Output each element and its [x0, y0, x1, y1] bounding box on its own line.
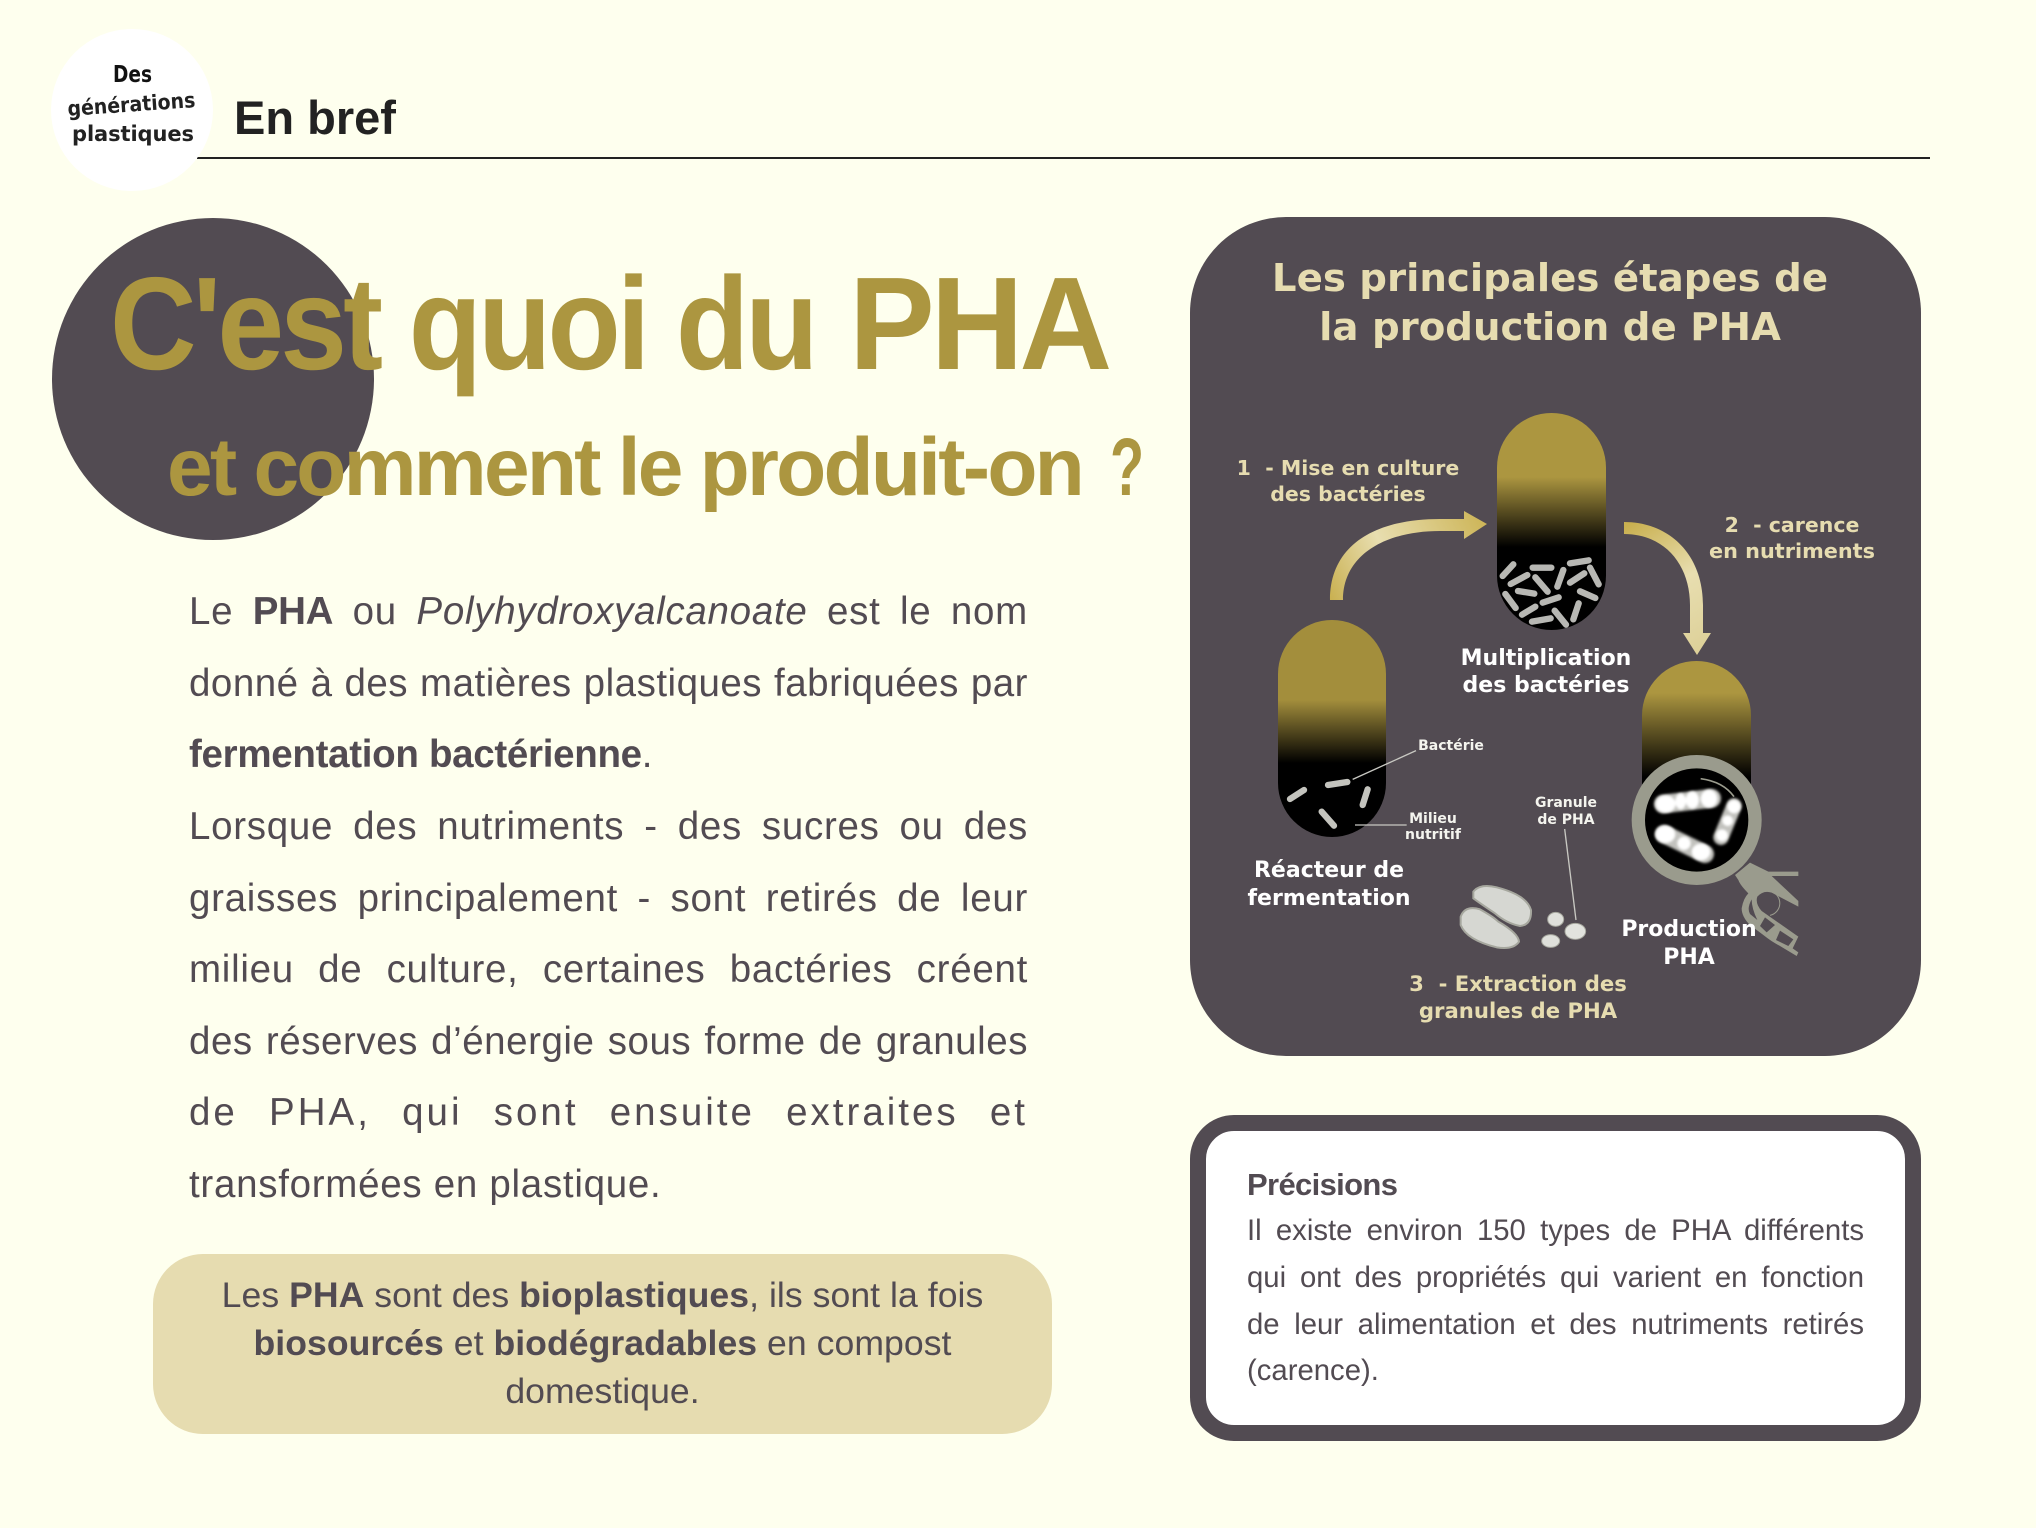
- small annotations: Granule: [1535, 795, 1597, 811]
- step labels: 2 - carence: [1725, 513, 1859, 537]
- text block: definition: transformées en plastique.: [189, 1163, 661, 1206]
- capsule: multiplication: [1497, 413, 1606, 630]
- panel: precisions: [1190, 1115, 1921, 1441]
- precisions text: [1247, 1167, 1864, 1387]
- logo: Des: [113, 62, 152, 88]
- magnifier lens with bacteria: [1638, 762, 1755, 878]
- subtitle: et comment le produit-on: [167, 422, 1082, 513]
- step labels: en nutriments: [1709, 539, 1875, 563]
- callout: bioplastiques: [153, 1254, 1052, 1434]
- small annotations: [1405, 738, 1597, 843]
- small annotations: Milieu: [1409, 811, 1457, 827]
- text block: definition: de PHA, qui sont ensuite extraites et: [189, 1091, 1028, 1134]
- text block: definition: fermentation bactérienne.: [189, 733, 653, 776]
- text block: definition: graisses principalement - sont retirés de leur: [189, 877, 1028, 920]
- logo: plastiques: [72, 122, 194, 146]
- step labels: [1237, 456, 1875, 1023]
- magnifier handle: [1735, 863, 1798, 956]
- stage labels: fermentation: [1247, 886, 1411, 911]
- small annotations: de PHA: [1537, 812, 1595, 828]
- stage labels: Réacteur de: [1254, 858, 1404, 883]
- granules of PHA: [1461, 829, 1586, 948]
- logo: [51, 29, 213, 191]
- precisions body: [1247, 1214, 1864, 1387]
- text block: definition: donné à des matières plastiques fabriquées par: [189, 662, 1028, 705]
- arrow: step 1: [1330, 511, 1487, 600]
- callout: bioplastiques: domestique.: [505, 1371, 700, 1411]
- precisions body: (carence).: [1247, 1354, 1379, 1387]
- heading: En bref: En bref: [234, 91, 396, 144]
- capsule: production: [1642, 661, 1751, 878]
- logo: générations: [67, 88, 196, 121]
- step labels: granules de PHA: [1419, 998, 1618, 1023]
- stage labels: PHA: [1663, 945, 1715, 970]
- precisions body: qui ont des propriétés qui varient en fonction: [1247, 1261, 1864, 1294]
- step labels: 1 - Mise en culture: [1237, 456, 1459, 480]
- panel heading: la production de PHA: [1319, 305, 1781, 350]
- small annotations: nutritif: [1405, 827, 1462, 843]
- panel heading: Les principales étapes de: [1272, 256, 1828, 301]
- panel heading: [1272, 256, 1828, 350]
- capsule: reactor: [1278, 620, 1416, 837]
- small annotations: Bactérie: [1418, 738, 1484, 754]
- text block: definition: milieu de culture, certaines bactéries créent: [189, 948, 1028, 991]
- callout: bioplastiques: biosourcés et biodégradables en compost: [254, 1323, 951, 1363]
- text block: definition: [189, 590, 1028, 1206]
- step labels: des bactéries: [1270, 482, 1426, 506]
- precisions heading: Précisions: [1247, 1167, 1397, 1202]
- text block: definition: Le PHA ou Polyhydroxyalcanoate est le nom: [189, 590, 1028, 633]
- arrow: step 2: [1624, 522, 1711, 655]
- title: PHA: [849, 250, 1108, 397]
- title: C'est quoi du: [110, 250, 815, 397]
- stage labels: Multiplication: [1461, 646, 1631, 671]
- stage labels: [1247, 646, 1757, 970]
- decorative title circle: [52, 218, 374, 540]
- callout: bioplastiques: Les PHA sont des bioplastiques, ils sont la fois: [222, 1275, 983, 1315]
- subtitle: ?: [1110, 422, 1142, 513]
- header rule: [197, 157, 1930, 159]
- precisions body: de leur alimentation et des nutriments retirés: [1247, 1308, 1864, 1341]
- panel background: [1190, 217, 1921, 1056]
- text block: definition: Lorsque des nutriments - des sucres ou des: [189, 805, 1028, 848]
- stage labels: des bactéries: [1463, 673, 1629, 698]
- text block: definition: des réserves d’énergie sous forme de granules: [189, 1020, 1028, 1063]
- precisions body: Il existe environ 150 types de PHA différents: [1247, 1214, 1864, 1247]
- stage labels: Production: [1621, 917, 1757, 942]
- step labels: 3 - Extraction des: [1409, 971, 1627, 996]
